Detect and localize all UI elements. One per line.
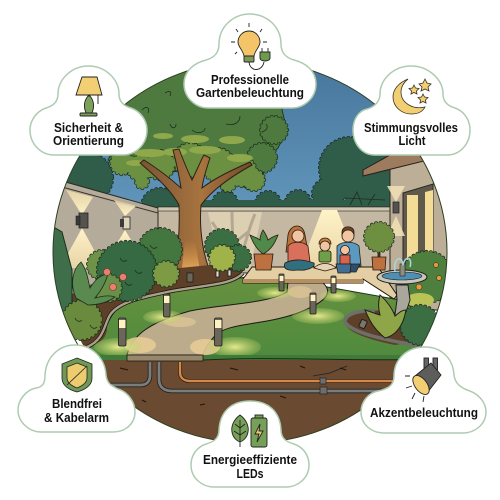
mulch bed and edging bbox=[72, 265, 243, 346]
callout: Sicherheit und Orientierung bbox=[30, 66, 147, 155]
callout: Stimmungsvolles Licht bbox=[353, 66, 470, 155]
text: Energieeffiziente bbox=[203, 453, 297, 467]
scene outline bbox=[53, 61, 447, 443]
text: Stimmungsvolles bbox=[364, 121, 458, 135]
pink flowers bbox=[104, 268, 126, 290]
sky bbox=[98, 72, 374, 204]
tree canopy bbox=[107, 72, 290, 193]
fountain and bed bbox=[345, 252, 452, 346]
callout: Energieeffiziente LEDs: LEDs bbox=[236, 467, 264, 481]
callout: Blendfrei und Kabelarm: & Kabelarm bbox=[44, 411, 109, 425]
terrace bbox=[243, 267, 397, 299]
potted plants bbox=[250, 223, 393, 270]
callout: Professionelle Gartenbeleuchtung bbox=[184, 14, 316, 108]
panel: garden scene bbox=[50, 55, 452, 450]
bollard lights bbox=[118, 270, 336, 346]
background hedges bbox=[67, 136, 390, 208]
callout: Akzentbeleuchtung bbox=[361, 347, 486, 433]
left wall bbox=[55, 182, 158, 294]
icon: light bulb with plug bbox=[231, 23, 270, 70]
icon: crescent moon and stars bbox=[393, 79, 431, 114]
icon: spotlight bbox=[405, 358, 441, 402]
wall lights bbox=[66, 190, 136, 268]
callout: Sicherheit und Orientierung: Orientierung bbox=[53, 134, 124, 148]
shrubs and planting bbox=[50, 225, 250, 339]
wall tree shadow and light bbox=[208, 212, 262, 270]
callout: Blendfrei und Kabelarm bbox=[18, 345, 135, 432]
callout: Stimmungsvolles Licht: Licht bbox=[398, 134, 426, 148]
callout: Professionelle Gartenbeleuchtung: Gartenbeleuchtung bbox=[196, 86, 304, 100]
icon: battery bbox=[251, 415, 267, 447]
icon: shield bbox=[62, 358, 92, 392]
text: Akzentbeleuchtung bbox=[370, 406, 478, 420]
icon: leaf bbox=[232, 415, 248, 447]
icon: table lamp bbox=[76, 77, 102, 116]
lawn bbox=[90, 276, 422, 355]
rear wall bbox=[158, 207, 393, 273]
text: Blendfrei bbox=[52, 397, 102, 411]
callout: Energieeffiziente LEDs bbox=[191, 401, 309, 487]
heading text: Professionelle bbox=[211, 73, 289, 87]
family bbox=[284, 226, 361, 273]
house bbox=[363, 155, 450, 310]
lawn glows bbox=[94, 287, 356, 357]
tree trunk and branches bbox=[140, 149, 252, 278]
soil with underground conduits bbox=[99, 354, 402, 440]
text: Sicherheit & bbox=[54, 121, 123, 135]
garden path bbox=[127, 282, 328, 355]
